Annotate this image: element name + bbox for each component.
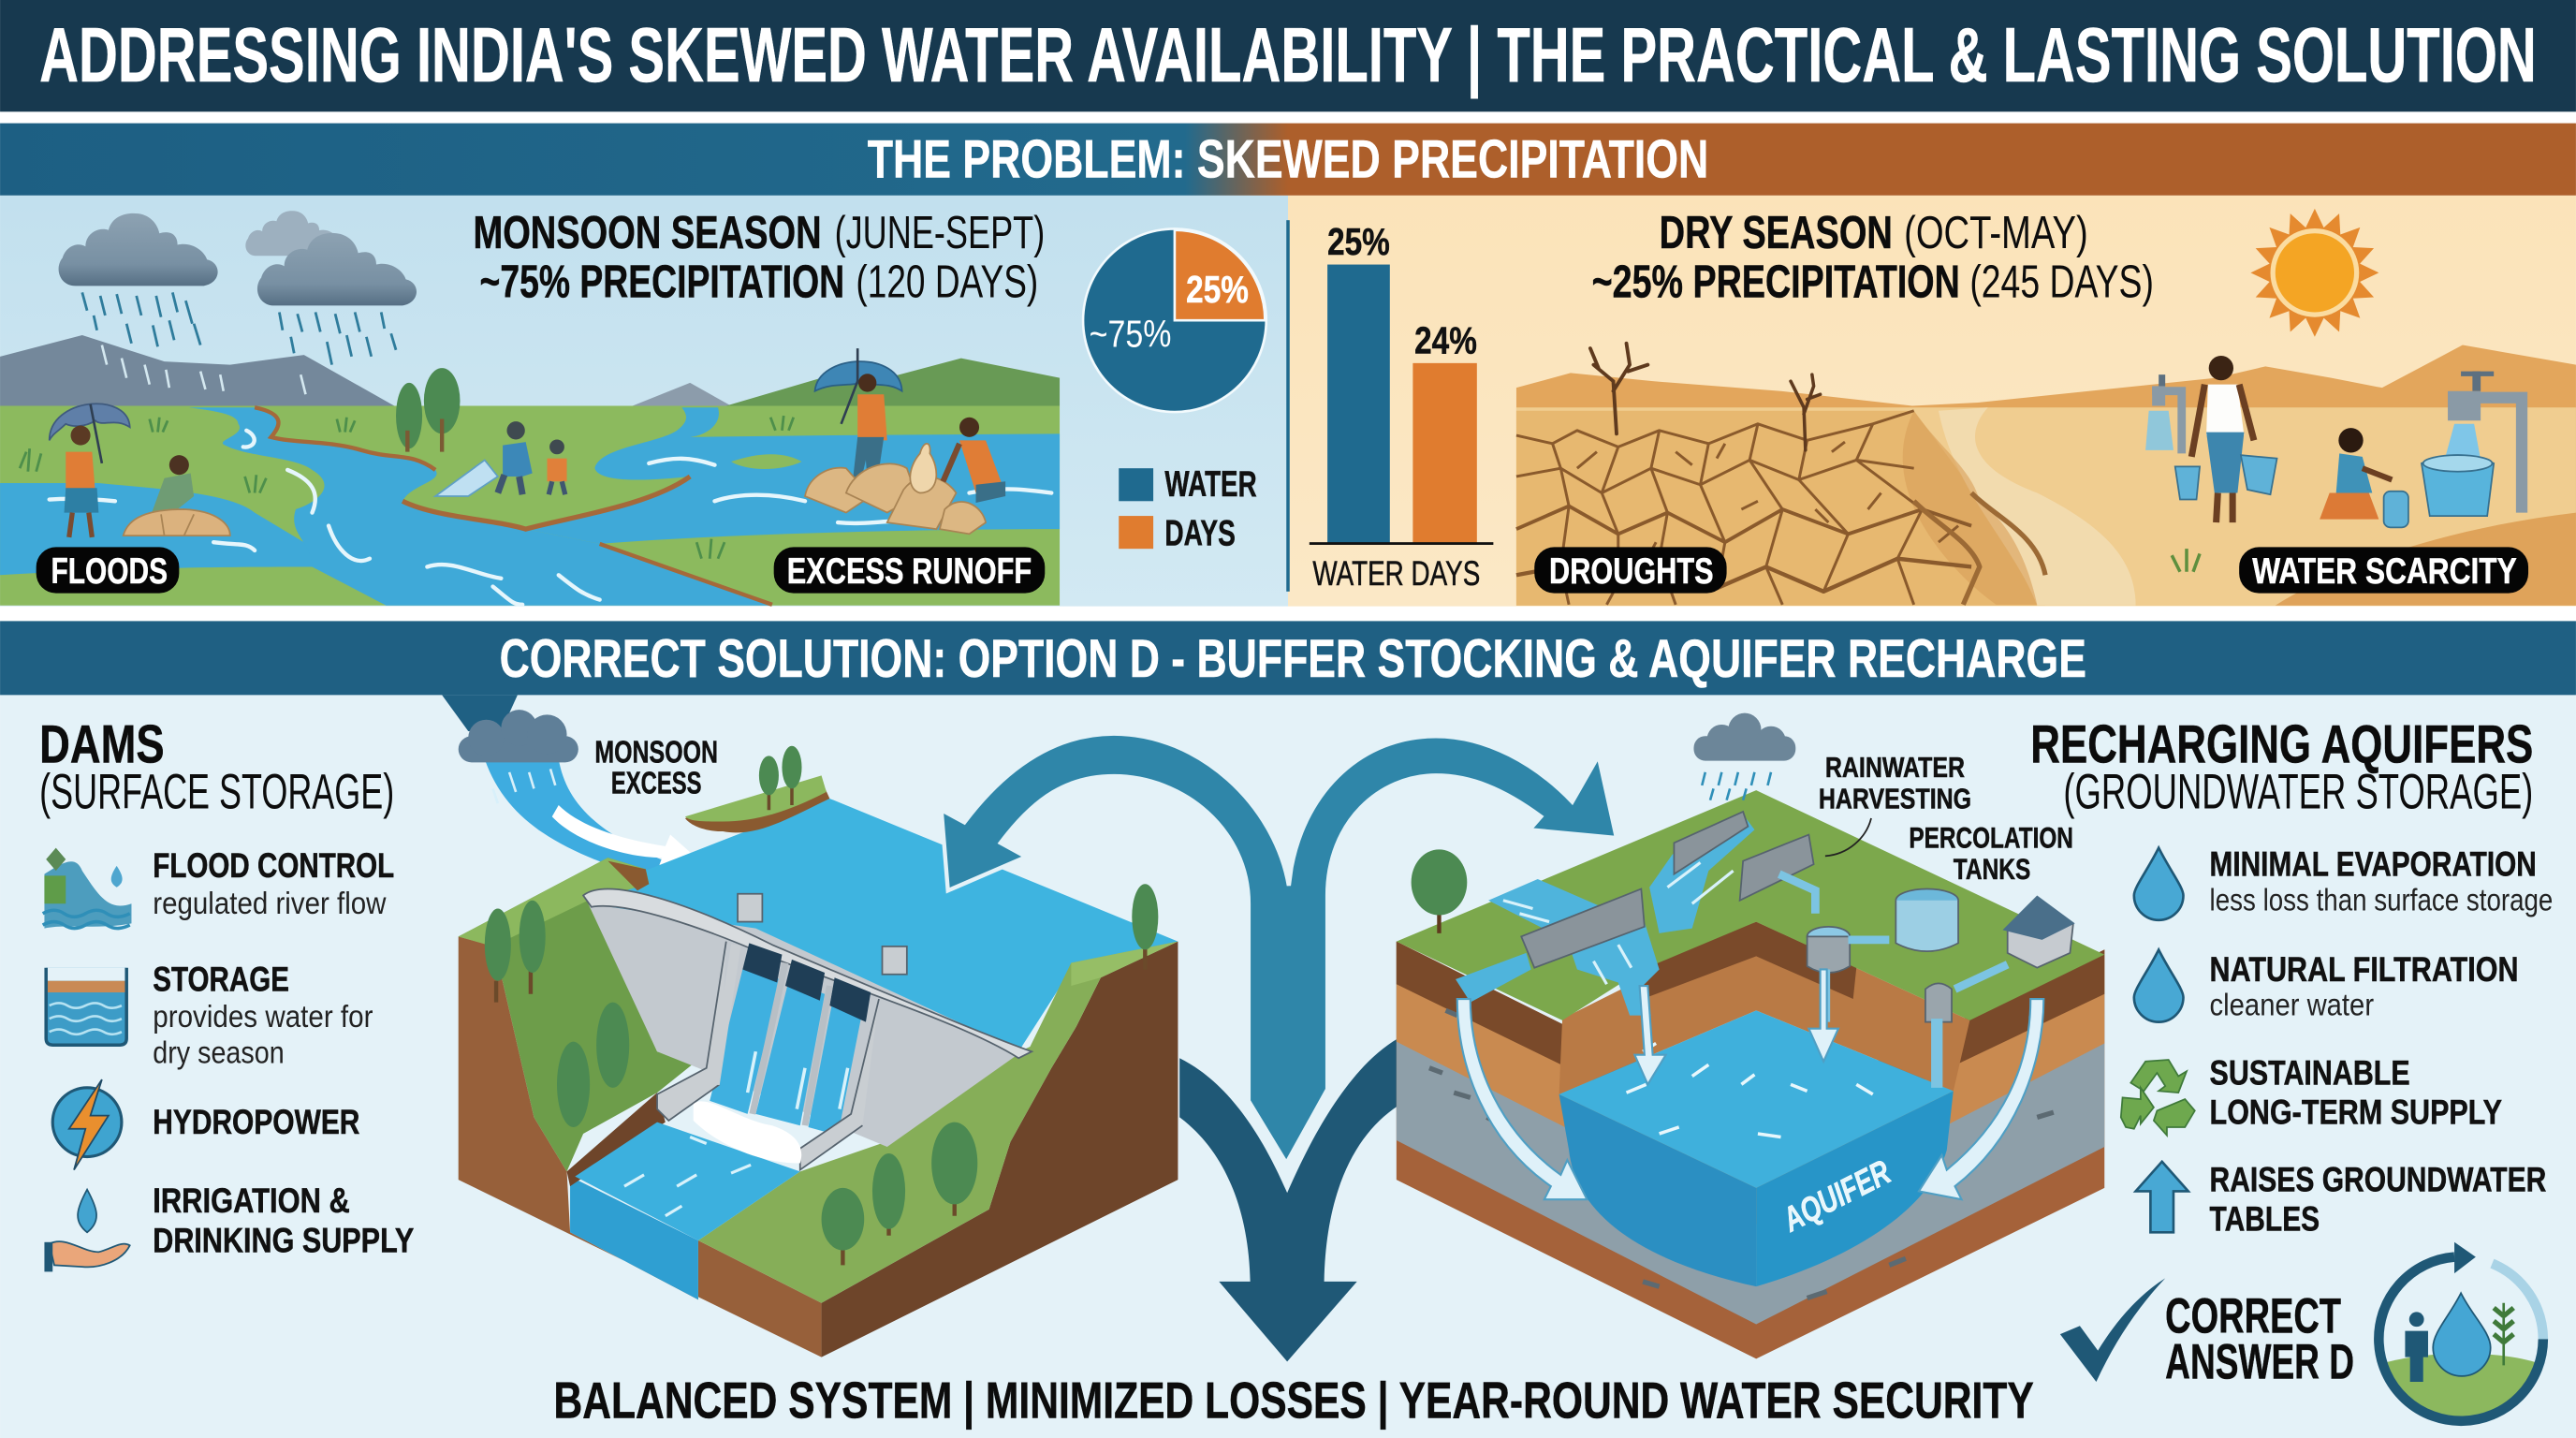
icon: up arrow	[2136, 1162, 2188, 1232]
arrow: to balanced system	[1179, 1038, 1398, 1361]
panel: dams text	[39, 714, 414, 1271]
bar chart	[1310, 220, 1493, 593]
label: excess runoff: EXCESS RUNOFF	[787, 551, 1032, 592]
icon: check mark	[2060, 1278, 2165, 1382]
text: flood control: regulated river flow	[153, 887, 387, 921]
left brown face	[459, 936, 822, 1357]
text: sustainable supply	[2210, 1053, 2502, 1131]
label: aquifer: AQUIFER	[1776, 1152, 1896, 1240]
label: monsoon excess: EXCESS	[611, 767, 701, 801]
arrows: recharge flow	[1457, 969, 2043, 1199]
icon: water drop	[2134, 848, 2183, 920]
illustration: dam block	[459, 710, 1178, 1357]
dam wall	[583, 889, 1032, 1147]
flood water	[0, 483, 320, 575]
title banner	[0, 0, 2576, 111]
dry season heading: (245 DAYS)	[1969, 257, 2154, 308]
arrow: arches to dams and aquifers	[942, 734, 1617, 1164]
icon: flood control	[43, 848, 131, 929]
check dams	[1521, 812, 1814, 968]
label: monsoon excess: MONSOON	[594, 735, 718, 770]
problem heading: THE PROBLEM: SKEWED PRECIPITATION	[868, 130, 1708, 190]
chart legend: DAYS	[1164, 514, 1236, 554]
text: storage: dry season	[153, 1036, 285, 1071]
figure: crouching woman with can	[2320, 428, 2408, 527]
surface streams	[1456, 816, 1754, 1016]
bar chart: 25%	[1327, 220, 1390, 263]
monsoon heading: (120 DAYS)	[856, 257, 1038, 308]
icon: cloud with rain	[1693, 713, 1795, 800]
label: water scarcity: WATER SCARCITY	[2252, 551, 2517, 592]
spillway	[657, 942, 879, 1170]
monsoon heading: ~75% PRECIPITATION	[480, 257, 844, 308]
illustration: aquifer block	[1397, 713, 2104, 1358]
dams heading: (SURFACE STORAGE)	[39, 764, 394, 819]
icon: irrigation hand and drop	[44, 1190, 130, 1271]
label: percolation tanks: TANKS	[1954, 852, 2030, 886]
panel: solution background	[0, 695, 2576, 1438]
figure: man placing sandbag	[124, 455, 230, 536]
illustration: drought landscape	[1516, 344, 2576, 606]
dry season heading: ~25% PRECIPITATION	[1592, 257, 1960, 308]
icon: filtered water drop	[2134, 949, 2183, 1022]
back island	[685, 746, 829, 832]
dry season heading: (OCT-MAY)	[1904, 208, 2088, 258]
aquifers heading	[2030, 714, 2533, 819]
text: minimal evaporation	[2210, 844, 2553, 917]
label: percolation tanks: PERCOLATION	[1909, 821, 2073, 855]
text: irrigation and drinking: DRINKING SUPPLY	[153, 1221, 414, 1259]
left bank green	[459, 858, 698, 1171]
label: rainwater harvesting: HARVESTING	[1819, 782, 1971, 814]
illustration: monsoon flooding landscape	[0, 211, 1060, 606]
panel: monsoon season	[0, 196, 1288, 607]
label: rainwater harvesting	[1819, 751, 1971, 856]
dams heading: DAMS	[39, 714, 165, 774]
dry season heading	[1592, 208, 2154, 308]
text: natural filtration: NATURAL FILTRATION	[2210, 950, 2519, 989]
text: irrigation and drinking: IRRIGATION &	[153, 1181, 350, 1220]
icon: recycling arrows	[2121, 1060, 2195, 1136]
text: natural filtration	[2210, 950, 2519, 1023]
text: raises groundwater: TABLES	[2210, 1200, 2320, 1239]
icon: big tap and bucket	[2422, 372, 2522, 516]
text: storage: provides water for	[153, 1000, 373, 1034]
dams heading	[39, 714, 394, 819]
bar chart: 24%	[1414, 318, 1477, 361]
figure: woman with umbrella	[50, 404, 130, 537]
text: storage: STORAGE	[153, 960, 289, 998]
label: floods: FLOODS	[51, 551, 168, 592]
trees	[485, 884, 1158, 1265]
pie chart: ~75%	[1090, 312, 1171, 355]
cracked earth	[1516, 411, 2045, 605]
bar chart: WATER DAYS	[1312, 554, 1480, 593]
rain stream from cloud	[459, 710, 700, 879]
figure: man with umbrella on sandbags	[815, 348, 902, 481]
correct answer callout: CORRECT	[2165, 1288, 2341, 1343]
text: raises groundwater	[2210, 1160, 2546, 1239]
pipes and tanks	[1779, 874, 2075, 1088]
reservoir water	[583, 799, 1178, 1051]
conclusion statement: BALANCED SYSTEM | MINIMIZED LOSSES | YEAR-ROUND WATER SECURITY	[554, 1372, 2034, 1431]
text: natural filtration: cleaner water	[2210, 989, 2374, 1023]
chart legend: WATER	[1164, 464, 1257, 505]
icon: sun	[2250, 209, 2378, 337]
figure: crouching man with orange shirt	[943, 418, 1005, 503]
text: storage	[153, 960, 373, 1071]
pie chart	[1082, 227, 1267, 413]
icon: storage tank	[46, 968, 126, 1045]
figure: sandbag wall	[805, 444, 986, 534]
label: floods	[37, 547, 179, 594]
right brown face	[822, 942, 1178, 1357]
river below dam	[575, 1123, 800, 1240]
monsoon heading: (JUNE-SEPT)	[835, 208, 1045, 258]
green surface	[1397, 790, 2104, 1020]
rock layers	[1397, 942, 2104, 1358]
text: sustainable supply: LONG-TERM SUPPLY	[2210, 1093, 2502, 1131]
notch walls	[1559, 922, 1969, 1094]
pie chart: 25%	[1186, 268, 1249, 311]
text: flood control	[153, 846, 394, 921]
icon: water security circle	[2378, 1242, 2543, 1421]
icon: storm clouds	[59, 211, 417, 394]
dry season heading: DRY SEASON	[1660, 208, 1893, 258]
correct answer callout	[2165, 1288, 2354, 1389]
figure: adult and child walking	[435, 421, 567, 496]
label: droughts: DROUGHTS	[1549, 551, 1714, 592]
icon: left tap	[2145, 374, 2182, 453]
label: rainwater harvesting: RAINWATER	[1825, 751, 1965, 784]
dead trees	[1590, 344, 1821, 450]
correct answer callout: ANSWER D	[2165, 1334, 2354, 1389]
text: sustainable supply: SUSTAINABLE	[2210, 1053, 2410, 1092]
solution section header	[0, 621, 2576, 731]
text: irrigation and drinking	[153, 1181, 414, 1259]
label: percolation tanks	[1909, 821, 2073, 886]
problem section header	[0, 124, 2576, 196]
monsoon heading: MONSOON SEASON	[474, 208, 822, 258]
text: flood control: FLOOD CONTROL	[153, 846, 394, 885]
text: hydropower: HYDROPOWER	[153, 1103, 359, 1141]
tree on aquifer block	[1412, 849, 1467, 933]
chart legend	[1119, 464, 1257, 554]
figure: man carrying buckets	[2175, 356, 2277, 522]
panel: dry season	[1286, 196, 2576, 607]
label: monsoon excess	[594, 735, 718, 801]
river front face	[570, 1177, 698, 1299]
solution heading: CORRECT SOLUTION: OPTION D - BUFFER STOCKING & AQUIFER RECHARGE	[500, 629, 2086, 689]
right bank green	[698, 942, 1178, 1303]
main river	[189, 407, 772, 606]
right water	[526, 407, 1060, 544]
icon: hydropower	[52, 1079, 122, 1170]
aquifer water body	[1559, 1010, 1954, 1286]
monsoon heading	[474, 208, 1045, 308]
panel: aquifer text	[2030, 714, 2553, 1421]
